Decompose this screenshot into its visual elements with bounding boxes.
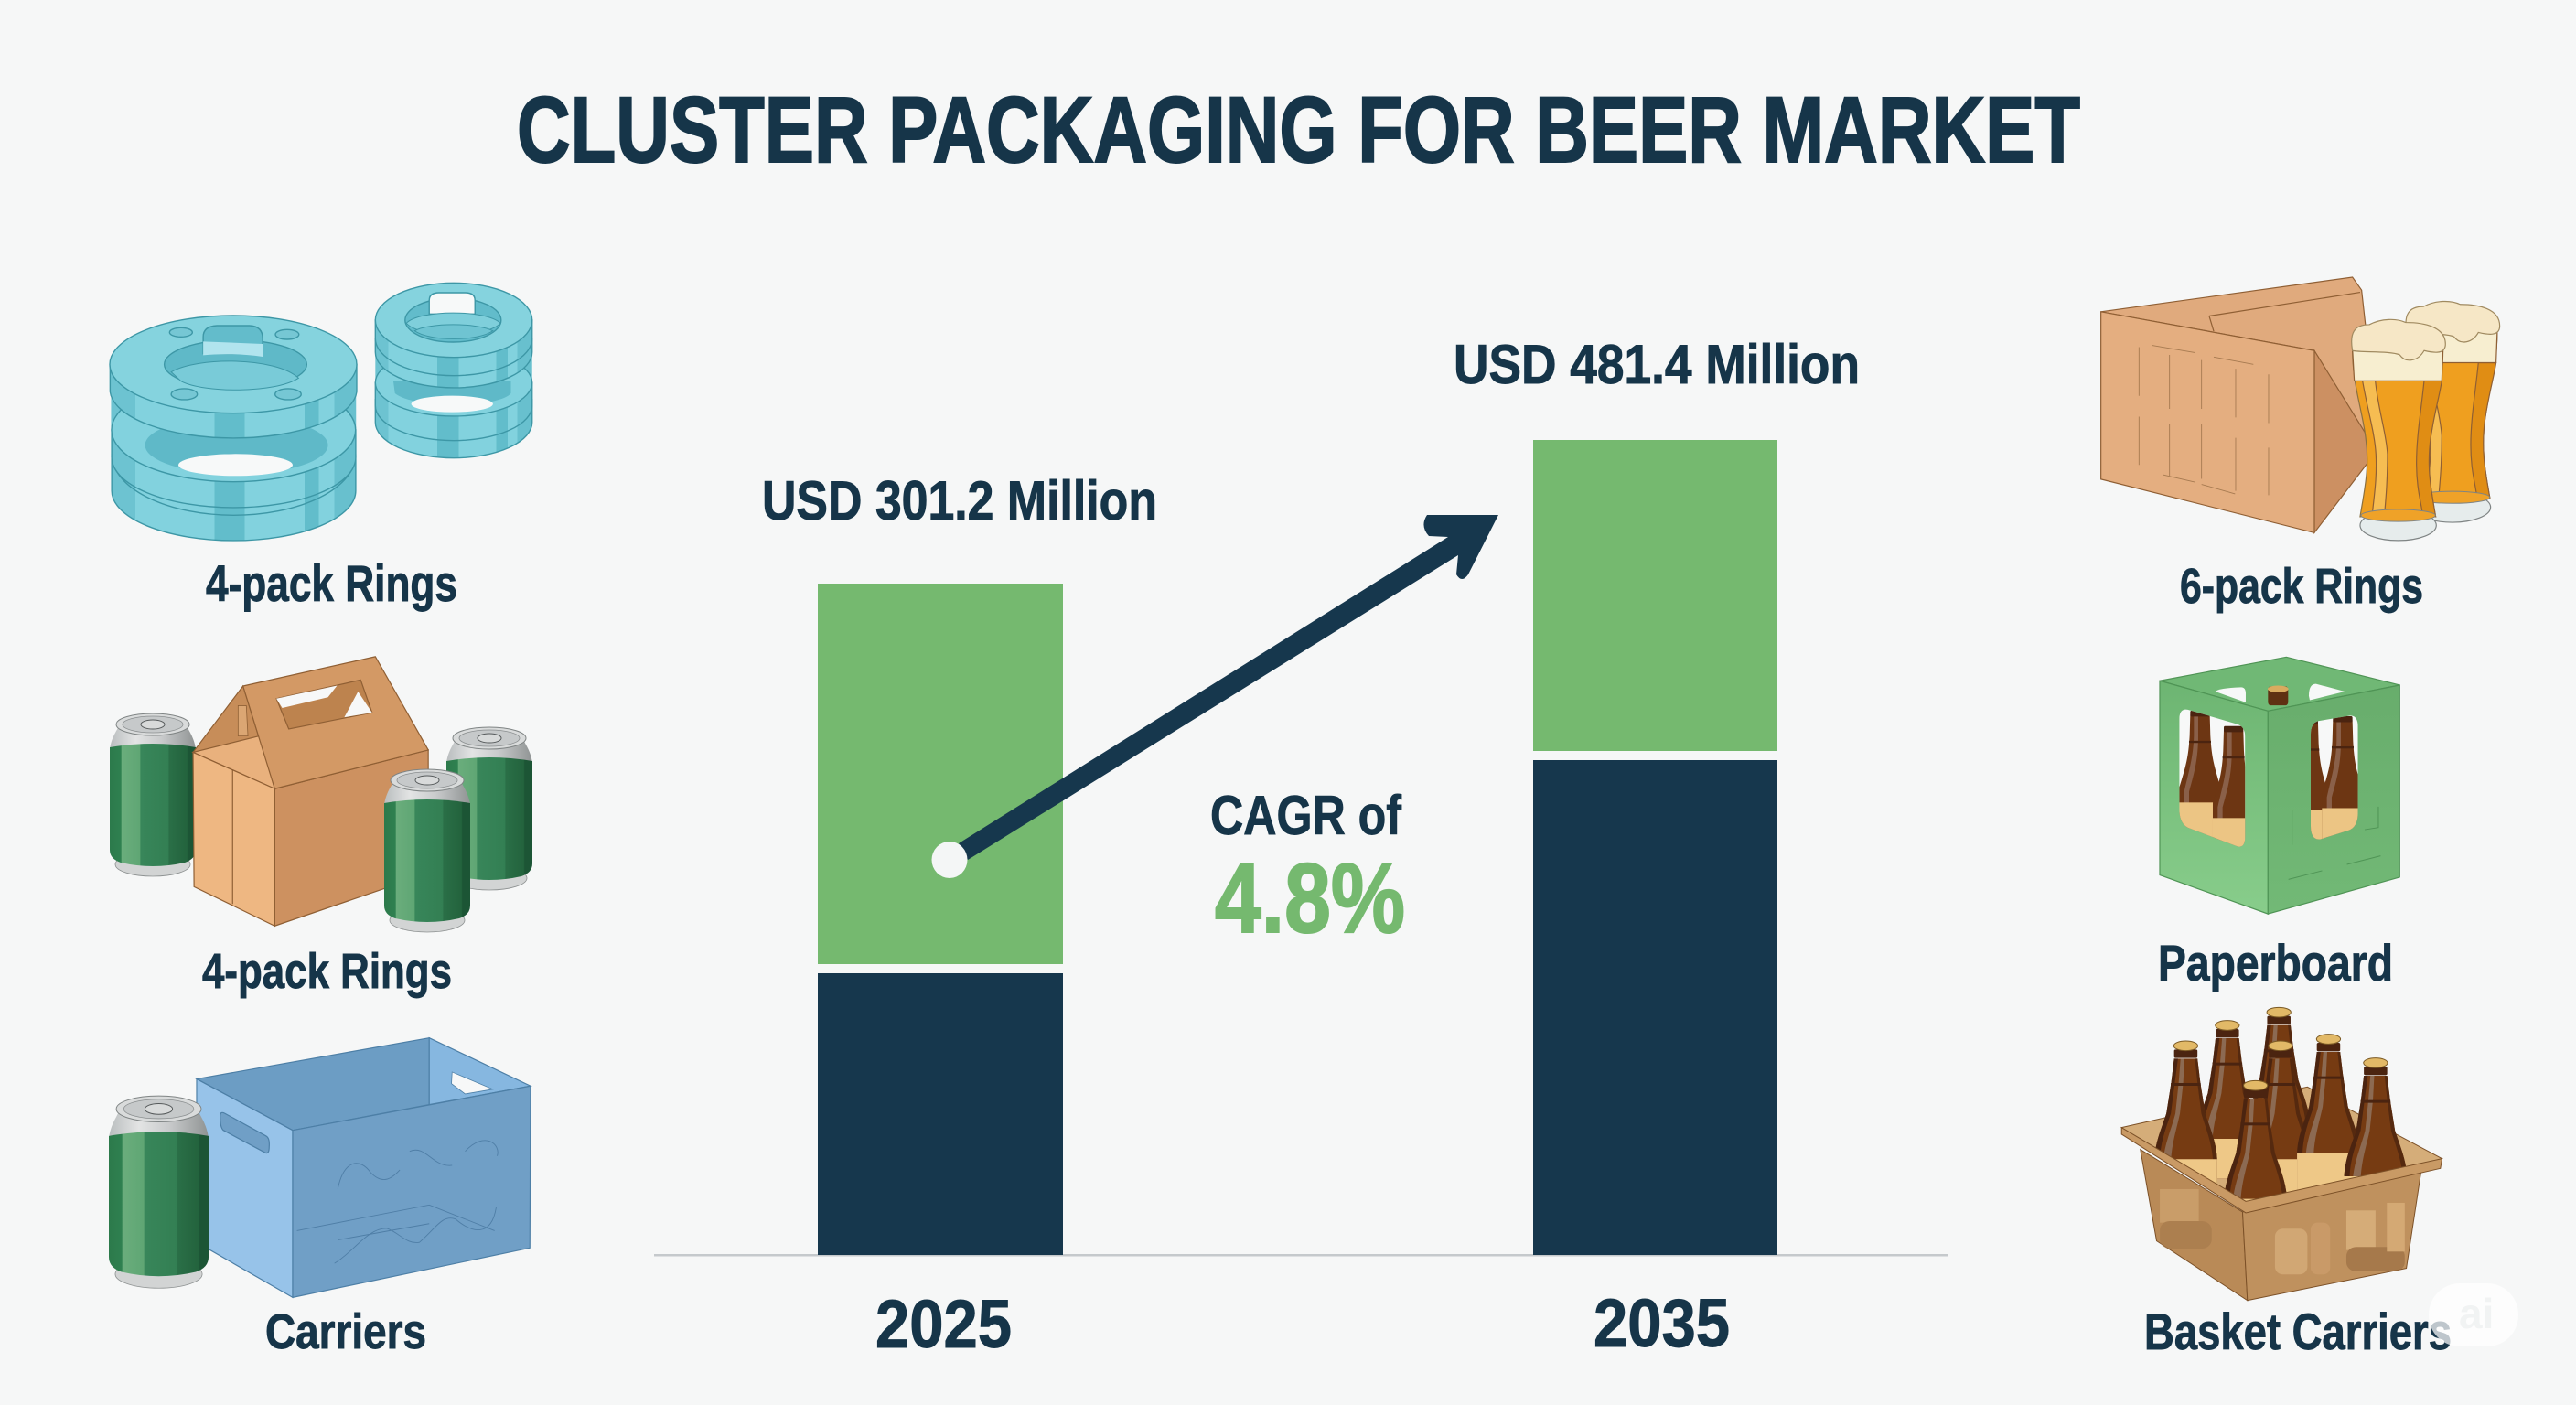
axis baseline [654, 1254, 1948, 1257]
axis label: 2035: 2035 [1594, 1285, 1730, 1361]
axis label: 2025: 2025 [875, 1286, 1012, 1362]
chart: market size bars [654, 334, 1948, 1362]
icon: kraft carton with beer glasses [2101, 277, 2500, 541]
label: Carriers: Carriers [265, 1304, 426, 1359]
bar: 2025 [818, 584, 1063, 1255]
bar: 2035 [1533, 440, 1777, 1255]
icon: blue carrier with can [109, 1038, 531, 1297]
watermark badge: ai [2459, 1290, 2494, 1337]
watermark badge [2429, 1283, 2518, 1346]
title: CLUSTER PACKAGING FOR BEER MARKET [517, 78, 2080, 182]
icon: green crate with bottles [2160, 657, 2399, 914]
callout: CAGR: CAGR of [1210, 785, 1402, 846]
label: 4-pack Rings: 4-pack Rings [206, 554, 457, 612]
label: Basket Carriers: Basket Carriers [2144, 1303, 2452, 1360]
icon: basket carrier with six bottles [2121, 1007, 2442, 1301]
callout: CAGR: 4.8% [1215, 842, 1405, 953]
panel: right product column [2101, 277, 2500, 1360]
arrow: growth [931, 515, 1498, 878]
icon: cardboard can carrier with cans [110, 657, 532, 932]
label: 4-pack Rings (second): 4-pack Rings [202, 944, 452, 999]
callout: CAGR [1210, 785, 1405, 953]
value: 2035: USD 481.4 Million [1454, 334, 1860, 395]
label: Paperboard: Paperboard [2158, 934, 2393, 992]
panel: left product column [109, 283, 532, 1359]
label: 6-pack Rings: 6-pack Rings [2180, 559, 2423, 614]
icon: stacked teal rings [110, 283, 532, 541]
value: 2025: USD 301.2 Million [762, 470, 1157, 531]
